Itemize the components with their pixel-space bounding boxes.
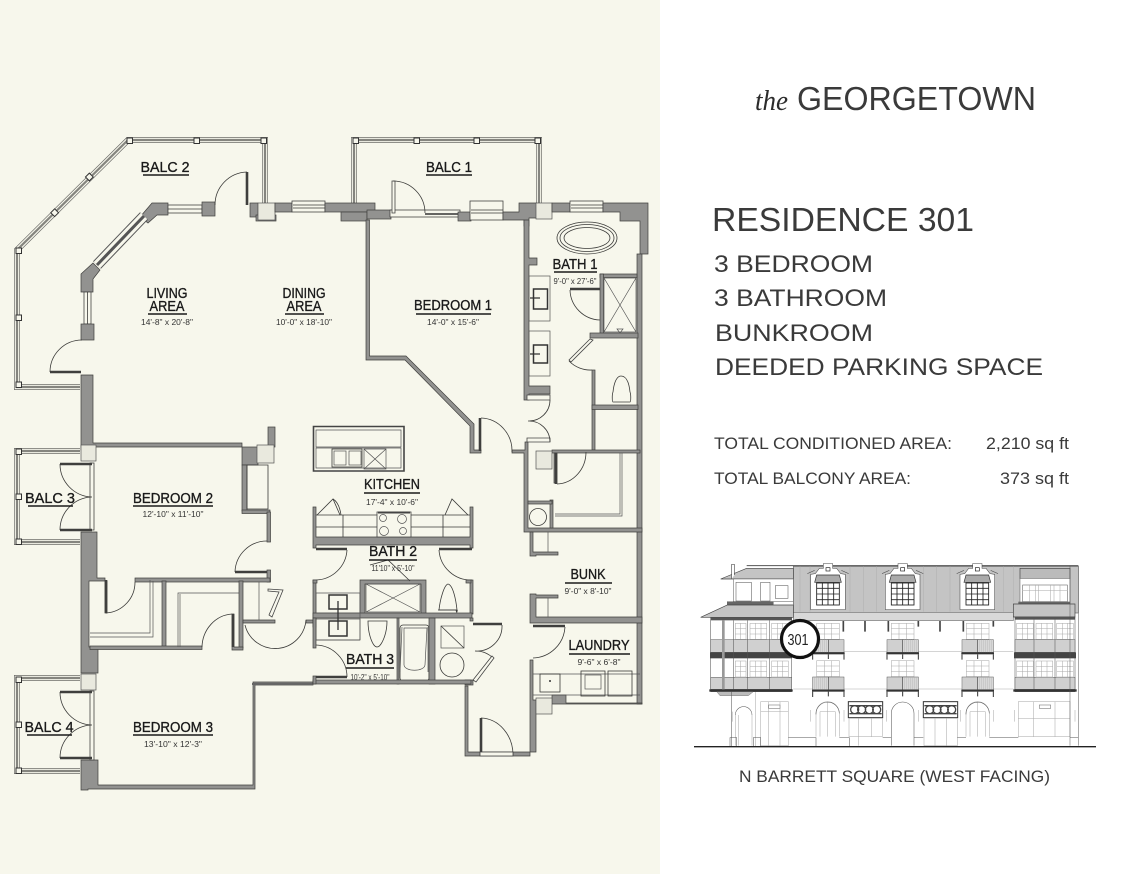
area table — [714, 435, 1069, 488]
features list: 3 BATHROOM — [714, 285, 887, 312]
label: bath 2: 11'10" x 5'-10" — [372, 564, 415, 573]
label: bedroom 3: 13'-10" x 12'-3" — [144, 740, 202, 749]
label: dining area: DINING — [282, 285, 326, 302]
features list — [714, 251, 1043, 381]
label: bedroom 1 — [414, 297, 492, 327]
label: bedroom 1: BEDROOM 1 — [414, 297, 492, 314]
label: bath 3 — [346, 651, 394, 682]
label: bunk — [564, 566, 612, 596]
label: kitchen: KITCHEN — [364, 476, 420, 493]
ground line — [694, 745, 1096, 749]
caption: N BARRETT SQUARE (WEST FACING) — [739, 768, 1050, 786]
label: living area — [141, 285, 193, 327]
building elevation — [694, 564, 1096, 747]
utility fixtures — [530, 453, 640, 696]
balcony 3 railing — [16, 449, 80, 544]
unit marker: 301: 301 — [788, 632, 809, 649]
balcony 2 railing — [16, 138, 266, 388]
label: bath 2 — [369, 543, 417, 573]
label: living area: 14'-8" x 20'-8" — [141, 318, 193, 327]
features list: 3 BEDROOM — [714, 251, 873, 278]
label: laundry — [568, 637, 630, 667]
label: bunk: BUNK — [570, 566, 606, 583]
label: bedroom 3: BEDROOM 3 — [133, 719, 213, 736]
unit marker: 301 — [782, 620, 818, 658]
center balconies and windows — [812, 621, 994, 697]
bath 2 and bath 3 fixtures — [313, 549, 502, 685]
bath 1 fixtures — [529, 222, 636, 402]
label: bedroom 2 — [133, 490, 213, 519]
left tower — [701, 564, 793, 747]
title: GEORGETOWN — [797, 80, 1036, 117]
ground floor — [730, 566, 1078, 747]
label: laundry: LAUNDRY — [568, 637, 630, 654]
label: balc 4: BALC 4 — [24, 719, 74, 736]
label: laundry: 9'-6" x 6'-8" — [578, 658, 621, 667]
label: living area: LIVING — [146, 285, 188, 302]
label: bath 3: BATH 3 — [346, 651, 394, 668]
label: balc 2: BALC 2 — [140, 159, 190, 176]
roof — [793, 566, 1078, 613]
label: bath 1 — [552, 256, 598, 286]
label: dining area — [276, 285, 332, 327]
exterior walls and windows: north — [81, 201, 648, 340]
label: bath 1: BATH 1 — [552, 256, 598, 273]
area table: TOTAL CONDITIONED AREA: — [714, 435, 952, 453]
balcony 4 railing — [16, 677, 80, 774]
label: dining area: AREA — [286, 298, 322, 315]
area table: 373 sq ft — [1000, 470, 1069, 488]
label: bedroom 3 — [133, 719, 213, 749]
balcony 1 railing — [353, 138, 540, 203]
heading: residence 301: RESIDENCE 301 — [712, 201, 974, 238]
area table: TOTAL BALCONY AREA: — [714, 470, 911, 488]
label: bedroom 2: BEDROOM 2 — [133, 490, 213, 507]
interior walls — [81, 220, 642, 790]
door swings — [50, 172, 600, 758]
area table: 2,210 sq ft — [986, 435, 1069, 453]
label: bath 1: 9'-0" x 27'-6" — [554, 277, 597, 286]
label: bath 3: 10'-2" x 5'-10" — [350, 673, 390, 682]
label: kitchen: 17'-4" x 10'-6" — [366, 498, 418, 507]
label: living area: AREA — [150, 298, 184, 315]
features list: BUNKROOM — [715, 320, 873, 347]
title: the — [755, 86, 788, 117]
label: kitchen — [364, 476, 420, 507]
features list: DEEDED PARKING SPACE — [715, 354, 1043, 381]
label: dining area: 10'-0" x 18'-10" — [276, 318, 332, 327]
facade lines — [755, 652, 1013, 747]
label: bunk: 9'-0" x 8'-10" — [564, 587, 612, 596]
panel: floor plan — [0, 0, 660, 874]
right tower — [1013, 568, 1077, 692]
label: balc 1: BALC 1 — [426, 159, 472, 176]
label: bath 2: BATH 2 — [369, 543, 417, 560]
kitchen fixtures — [313, 426, 473, 548]
label: bedroom 1: 14'-0" x 15'-6" — [427, 318, 479, 327]
label: balc 3: BALC 3 — [25, 490, 75, 507]
dormers — [807, 564, 998, 610]
label: bedroom 2: 12'-10" x 11'-10" — [142, 510, 204, 519]
